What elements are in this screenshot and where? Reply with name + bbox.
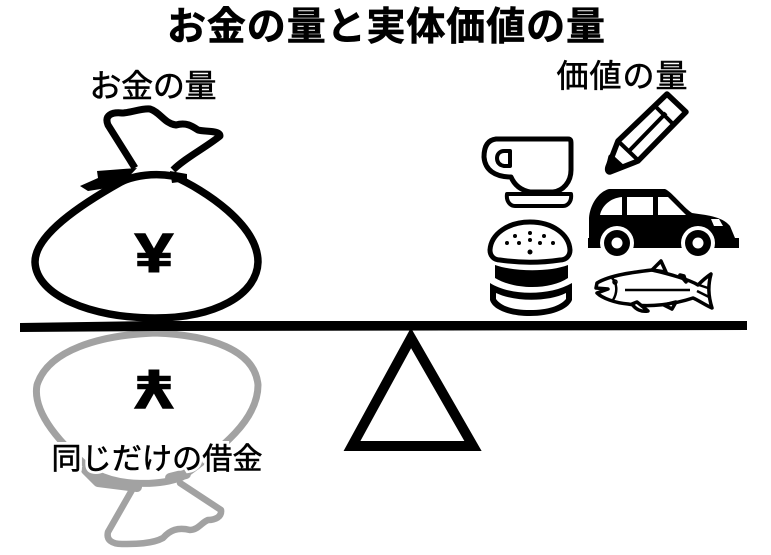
label: equal debt: 同じだけの借金 (52, 443, 262, 476)
reflected yen sign: ¥ (135, 358, 174, 419)
bag neck (107, 109, 220, 170)
icon: hamburger (490, 222, 572, 316)
money bag (35, 109, 258, 318)
icon: coffee cup (484, 139, 571, 206)
icon: pencil (608, 94, 686, 172)
title: お金の量と実体価値の量 (167, 6, 605, 49)
fulcrum triangle (352, 338, 473, 446)
label: amount of money: お金の量 (90, 68, 216, 104)
car windows (600, 197, 686, 215)
bag body (35, 175, 258, 318)
bag knot (80, 168, 187, 191)
label: equal debt: 同じだけの借金 (52, 443, 262, 476)
icon: fish (596, 261, 712, 311)
car wheels (600, 226, 634, 260)
icon: car (588, 189, 739, 260)
label: amount of value: 価値の量 (556, 58, 688, 94)
balance beam (20, 321, 747, 332)
reflected debt bag (36, 333, 258, 544)
yen sign: ¥ (135, 223, 174, 284)
